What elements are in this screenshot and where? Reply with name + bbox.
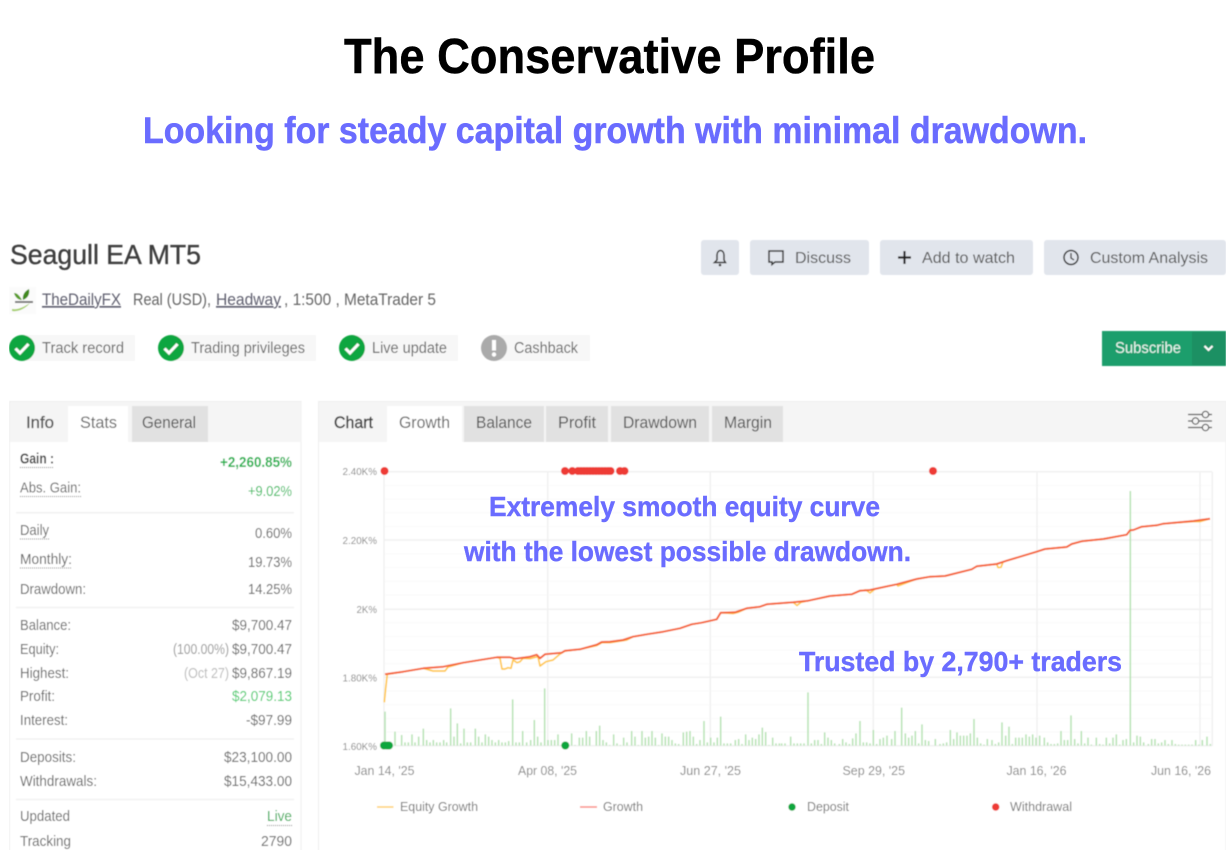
chart tab bar [319,402,1226,443]
button: discuss [750,240,869,275]
x axis labels: Jun 16, '26 [1151,764,1211,778]
stat: daily: Daily [20,523,50,539]
chart tab bar: Margin [724,414,772,432]
stat: interest: -$97.99 [246,713,292,729]
button: add to watch: Add to watch [922,250,1015,267]
stat: updated: Updated [20,809,70,825]
stat: withdrawals: Withdrawals: [20,774,97,790]
stat: highest: (Oct 27) [184,666,229,682]
stat: monthly: 19.73% [248,555,292,571]
stat: daily [20,523,292,542]
stat: daily: 0.60% [255,526,292,542]
chart legend: Deposit [807,800,850,814]
stat: equity [20,642,292,658]
panel: growth chart [318,402,1226,850]
stat: monthly: Monthly: [20,552,72,568]
chart tab bar: Drawdown [623,414,697,432]
stat: absolute gain: +9.02% [248,484,292,500]
badge: track record: Track record [42,340,124,357]
stat: gain [20,452,292,471]
stat: gain: +2,260.85% [220,455,292,471]
stat: highest: $9,867.19 [232,666,292,682]
stat: absolute gain [20,481,292,500]
stat: withdrawals [20,774,292,790]
stat: absolute gain: Abs. Gain: [20,481,81,497]
account name heading: Seagull EA MT5 [10,239,201,270]
y axis labels: 1.80K% [342,672,377,684]
y axis labels: 2.20K% [342,535,377,547]
y axis labels [342,466,377,753]
stat: drawdown [20,582,292,598]
button: subscribe [1102,331,1226,366]
stats tab bar [10,402,301,443]
stat: profit: Profit: [20,689,55,705]
withdrawal markers [380,467,937,475]
account meta line: , 1:500 , MetaTrader 5 [284,291,436,309]
chart tab bar: Growth [399,414,450,432]
icon: account logo [9,287,36,314]
stats tab bar: Info [26,414,54,432]
stat: tracking: 2790 [261,834,292,850]
button: custom analysis: Custom Analysis [1090,250,1208,267]
chart legend: Withdrawal [1010,800,1072,814]
stat: deposits: $23,100.00 [224,750,292,766]
stat: interest [20,713,292,729]
stat: drawdown: Drawdown: [20,582,86,598]
badge: cashback [481,335,590,361]
badge: trading privileges: Trading privileges [191,340,305,357]
x axis labels: Sep 29, '25 [842,764,905,778]
y axis labels: 2K% [356,604,377,616]
badge: cashback: Cashback [514,340,578,357]
callout: smooth equity curve: with the lowest possible drawdown. [463,536,911,567]
x axis labels: Apr 08, '25 [518,764,577,778]
badge: live update: Live update [372,340,447,357]
stat: equity: $9,700.47 [232,642,292,658]
stats dividers [16,513,294,800]
callout: smooth equity curve [463,491,911,567]
chart legend [377,800,1072,814]
stat: interest: Interest: [20,713,68,729]
panel: stats [10,402,301,850]
account meta line: Headway [216,291,282,309]
stat: deposits [20,750,292,766]
stat: updated [20,809,292,826]
stat: updated: Live [267,809,292,825]
x axis labels: Jan 16, '26 [1006,764,1067,778]
badge: trading privileges [158,335,316,361]
stat: balance: Balance: [20,618,71,634]
stat: equity: Equity: [20,642,59,658]
button: subscribe: Subscribe [1115,340,1181,357]
badge: track record [9,335,135,361]
badge: live update [339,335,458,361]
x axis labels: Jun 27, '25 [680,764,741,778]
y axis labels: 2.40K% [342,466,377,478]
growth line [385,519,1210,674]
callout: smooth equity curve: Extremely smooth equity curve [489,491,880,522]
chart tab bar: Chart [334,414,373,432]
account meta line [42,291,436,309]
y axis labels: 1.60K% [342,741,377,753]
x axis labels: Jan 14, '25 [354,764,415,778]
dashboard screenshot [9,239,1226,850]
stat: tracking [20,834,292,850]
subtitle: Looking for steady capital growth with minimal drawdown. [143,110,1087,151]
stat: highest: Highest: [20,666,69,682]
stat: drawdown: 14.25% [248,582,292,598]
account meta line: TheDailyFX [42,291,121,309]
deposit markers [380,742,569,750]
stats tab bar: Stats [80,414,117,432]
chart legend: Equity Growth [400,800,478,814]
stat: profit [20,689,292,705]
stat: gain: Gain : [20,452,54,468]
chart legend: Growth [603,800,643,814]
stat: equity: (100.00%) [173,642,229,658]
callout: trusted by traders: Trusted by 2,790+ traders [799,646,1122,677]
stat: tracking: Tracking [20,834,71,850]
button: custom analysis [1044,240,1226,275]
button: notifications bell [701,240,739,275]
icon: chart settings sliders [1188,411,1212,431]
stat: highest [20,666,292,682]
stat: balance [20,618,292,634]
daily bars [385,491,1210,746]
stat: withdrawals: $15,433.00 [224,774,292,790]
stats tab bar: General [142,414,196,432]
button: discuss: Discuss [795,250,851,267]
account meta line: Real (USD), [133,291,211,309]
stat: monthly [20,552,292,571]
chart grid [384,472,1212,746]
chart tab bar: Balance [476,414,532,432]
equity growth line [384,519,1210,702]
stat: deposits: Deposits: [20,750,76,766]
button: add to watch [880,240,1033,275]
stat: profit: $2,079.13 [232,689,292,705]
title: The Conservative Profile [344,30,875,84]
x axis labels [354,764,1211,778]
stat: balance: $9,700.47 [232,618,292,634]
chart tab bar: Profit [558,414,596,432]
